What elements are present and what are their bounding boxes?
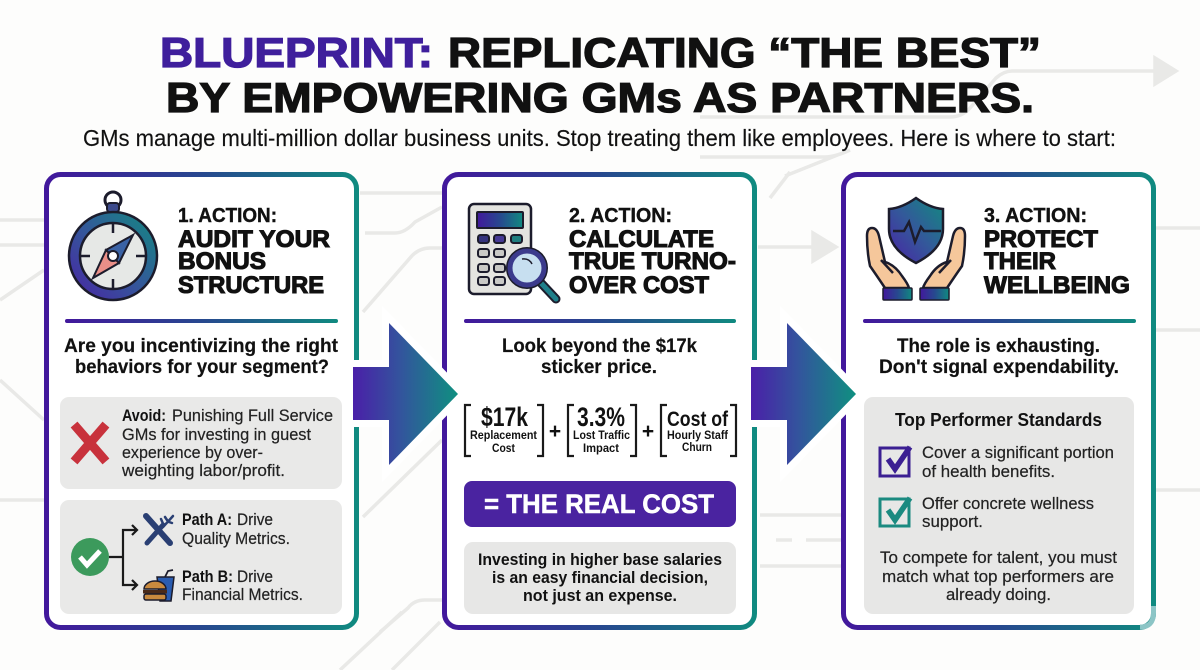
icon: hands and shield: [867, 198, 965, 300]
heading: action 2: [569, 205, 736, 299]
callout: top performer standards: Top Performer Standards: [895, 409, 1102, 430]
title: [160, 29, 1041, 121]
callout: paths: Path A:: [182, 511, 232, 529]
panel: action 2 calculate turnover cost: [444, 174, 754, 628]
question text: Are you incentivizing the right: [64, 336, 339, 357]
question text: The role is exhausting.: [897, 336, 1100, 357]
title: REPLICATING “THE BEST”: [448, 29, 1041, 76]
callout: avoid: weighting labor/profit.: [121, 462, 285, 480]
callout: paths: Path B:: [182, 568, 233, 586]
callout: top performer standards: match what top performers are: [882, 568, 1114, 586]
callout: top performer standards: Offer concrete wellness: [922, 495, 1094, 513]
formula: Cost: [492, 441, 515, 455]
callout: top performer standards: support.: [922, 513, 983, 531]
callout: top performer standards: To compete for talent, you must: [880, 549, 1117, 567]
formula: Impact: [583, 441, 619, 455]
heading: action 3: [984, 205, 1130, 299]
formula: Replacement: [470, 428, 537, 442]
question text: [64, 336, 339, 378]
icon: calculator with magnifier: [469, 204, 556, 299]
callout: investing: not just an expense.: [523, 587, 677, 605]
question text: sticker price.: [541, 357, 657, 378]
title: BY EMPOWERING GMs AS PARTNERS.: [166, 74, 1034, 121]
callout: paths: [60, 500, 342, 614]
heading: action 2: TRUE TURNO-: [569, 248, 736, 275]
icon: burger and drink: [143, 570, 174, 601]
callout: investing: Investing in higher base salaries: [478, 551, 722, 569]
icon: red cross: [77, 428, 103, 458]
question text: Look beyond the $17k: [502, 336, 697, 357]
formula: 3.3%: [577, 402, 625, 432]
icon: purple checkbox: [880, 447, 910, 476]
title: BLUEPRINT:: [160, 29, 433, 76]
callout: paths: Drive: [237, 511, 273, 529]
heading: action 3: THEIR: [984, 248, 1056, 275]
callout: paths: Financial Metrics.: [182, 586, 303, 604]
formula: +: [549, 420, 561, 443]
callout: avoid: [60, 397, 342, 489]
panel: action 1 audit bonus structure: [46, 174, 356, 628]
formula: +: [642, 420, 654, 443]
result banner: = THE REAL COST: [484, 489, 714, 519]
callout: paths: Quality Metrics.: [182, 530, 290, 548]
formula: Cost of: [667, 408, 729, 431]
heading: action 1: [178, 205, 330, 299]
callout: top performer standards: already doing.: [946, 586, 1051, 604]
formula: [465, 402, 736, 456]
callout: top performer standards: of health benefits.: [922, 463, 1055, 481]
heading: action 3: PROTECT: [984, 226, 1098, 253]
formula: Lost Traffic: [573, 428, 630, 442]
question text: behaviors for your segment?: [75, 357, 329, 378]
arrow: panel 2 to panel 3: [751, 323, 856, 465]
subtitle: GMs manage multi-million dollar business units. Stop treating them like employees. Here is where to start:: [83, 125, 1116, 151]
formula: Churn: [682, 440, 712, 454]
callout: paths: Drive: [237, 568, 273, 586]
formula: $17k: [481, 402, 529, 432]
heading: action 1: BONUS: [178, 248, 266, 275]
question text: [502, 336, 697, 378]
heading: action 1: 1. ACTION:: [178, 205, 277, 227]
icon: compass: [69, 192, 157, 300]
heading: action 3: 3. ACTION:: [984, 205, 1087, 227]
heading: action 2: CALCULATE: [569, 226, 714, 253]
icon: fork and knife: [146, 516, 173, 543]
heading: action 2: 2. ACTION:: [569, 205, 672, 227]
callout: avoid: experience by over-: [122, 444, 263, 462]
callout: top performer standards: [864, 397, 1134, 614]
callout: top performer standards: Cover a significant portion: [922, 444, 1114, 462]
heading: action 2: OVER COST: [569, 272, 709, 299]
heading: action 3: WELLBEING: [984, 272, 1130, 299]
question text: [879, 336, 1119, 378]
callout: investing: is an easy financial decision,: [492, 569, 708, 587]
icon: green check: [71, 538, 109, 576]
callout: avoid: Avoid:: [122, 407, 166, 425]
callout: avoid: Punishing Full Service: [172, 407, 333, 425]
heading: action 1: AUDIT YOUR: [178, 226, 330, 253]
formula: Hourly Staff: [667, 428, 729, 442]
arrow: panel 1 to panel 2: [353, 323, 458, 465]
callout: avoid: GMs for investing in guest: [122, 426, 311, 444]
icon: teal checkbox: [880, 498, 910, 526]
panel: action 3 protect wellbeing: [844, 174, 1154, 628]
callout: investing: [464, 542, 736, 614]
heading: action 1: STRUCTURE: [178, 272, 324, 299]
result banner: [464, 481, 736, 527]
question text: Don't signal expendability.: [879, 357, 1119, 378]
